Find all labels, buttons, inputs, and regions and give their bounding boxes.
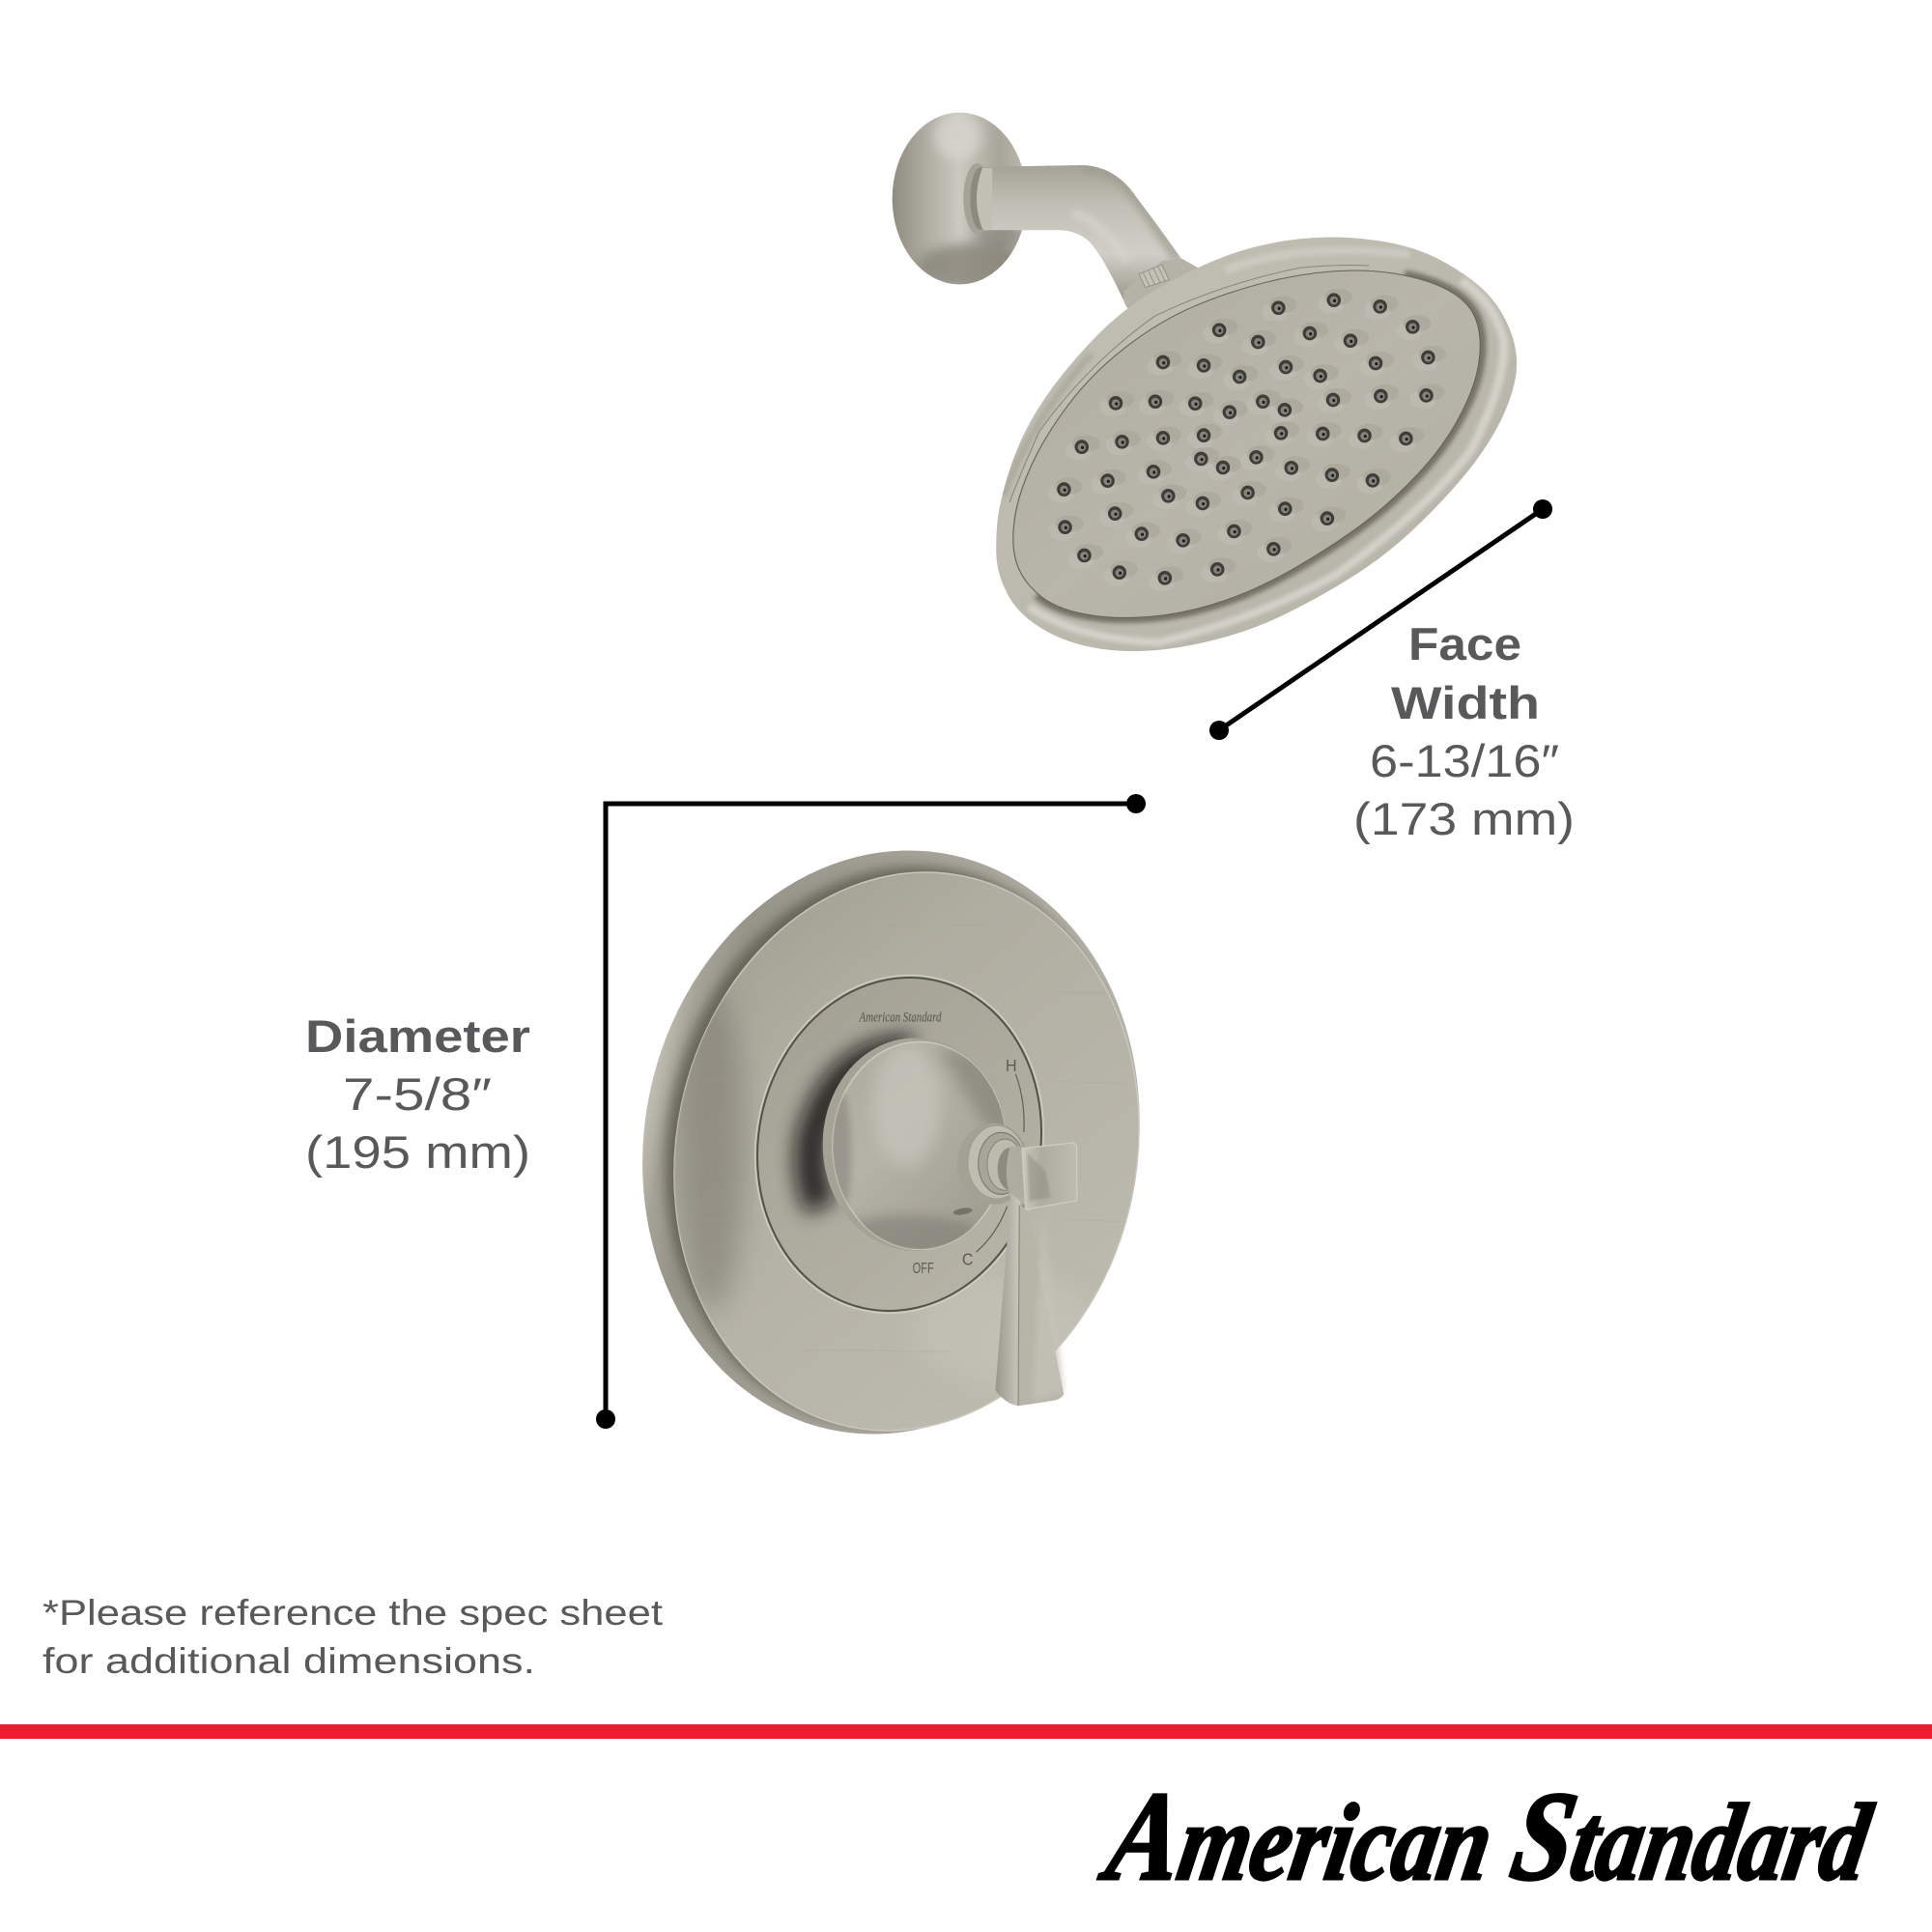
face width label: 6-13/16″ [1370,735,1559,786]
C marking: C [962,1250,974,1269]
American Standard logo: American Standard [1093,1765,1884,1907]
H marking: H [1006,1056,1017,1075]
inner ring [724,949,1074,1340]
arm and flange assembly [893,112,1199,312]
back escutcheon [589,804,1193,1481]
face width label: (173 mm) [1353,793,1575,844]
lever handle [995,1193,1064,1406]
footnote: for additional dimensions. [43,1641,535,1681]
head assembly [996,238,1517,651]
knob dome [823,1037,1010,1264]
footnote [43,1593,664,1681]
diameter label: 7-5/8″ [343,1068,492,1120]
rim shading [1003,250,1504,642]
diameter label: (195 mm) [305,1126,530,1178]
head outer shell [996,238,1517,651]
footnote: *Please reference the spec sheet [43,1593,664,1633]
valve controls [693,924,1128,1406]
face width label: Width [1391,677,1540,728]
diameter label: Diameter [305,1010,530,1062]
wall flange [893,112,1029,290]
temperature arc [976,1074,1024,1252]
diameter dimension bracket [596,794,1146,1429]
face width label: Face [1408,618,1521,669]
brushed finish [693,924,1128,1351]
rim groove [1009,266,1369,502]
face plate [1013,270,1480,617]
engraved brand mark: American Standard [859,1009,942,1026]
face width dimension line [1209,499,1552,740]
diameter label [305,1010,530,1178]
lever bracket [1022,1143,1077,1209]
threaded collar [1123,259,1199,312]
shower head illustration [893,112,1517,651]
valve trim illustration [589,804,1193,1481]
spray nozzles [1048,289,1447,591]
red divider bar [0,1724,1932,1739]
shower arm [963,163,1184,300]
face width label [1353,618,1575,844]
stem collar [957,1123,1029,1205]
front plate [623,829,1190,1474]
OFF marking: OFF [913,1260,934,1277]
